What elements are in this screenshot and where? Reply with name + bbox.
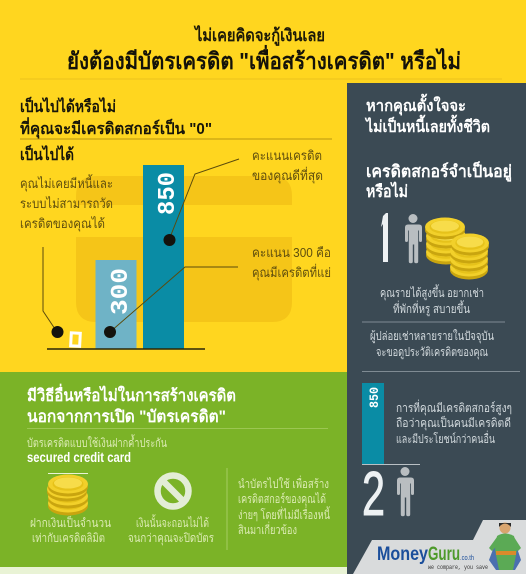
heading: never in debt: ไม่เป็นหนี้เลยทั้งชีวิต xyxy=(364,114,490,136)
text: use the card to build score: ง่ายๆ โดยที่ไม่มีเรื่องหนี้ xyxy=(238,506,330,522)
heading: never in debt xyxy=(364,93,490,136)
callout: best score xyxy=(252,148,323,184)
reason 2: 850 bar xyxy=(362,383,384,464)
logo text xyxy=(377,544,488,571)
logo text: we compare, you save xyxy=(428,564,488,571)
text: deposit equals limit: เท่ากับเครดิตลิมิต xyxy=(32,531,105,545)
bar label: 0 xyxy=(71,333,80,346)
callout lines and dots xyxy=(43,159,239,338)
text: no debt history: คุณไม่เคยมีหนี้และ xyxy=(20,174,113,192)
reason 2: 850 bar: 850 xyxy=(367,387,382,408)
callout: best score: คะแนนเครดิต xyxy=(252,148,322,163)
reason 1: coins xyxy=(425,218,489,280)
mascot xyxy=(489,522,521,570)
text: use the card to build score: สินมาเกี่ยวข้อง xyxy=(238,521,297,537)
text: no debt history: เครดิตของคุณได้ xyxy=(20,216,105,232)
subheading: possible: เป็นไปได้ xyxy=(20,143,74,164)
text: use the card to build score: เครดิตสกอร์ของคุณได้ xyxy=(238,492,326,507)
text: higher income: ที่พักที่หรู สบายขึ้น xyxy=(393,300,470,317)
heading: zero score question: เป็นไปได้หรือไม่ xyxy=(20,95,116,116)
panel: zero credit score xyxy=(20,95,332,349)
credit card watermark xyxy=(76,176,292,322)
text: landlords check credit: ผู้ปล่อยเช่าหลายรายในปัจจุบัน xyxy=(370,329,494,344)
text: high score benefits: ถือว่าคุณเป็นคนมีเครดิตดี xyxy=(396,415,511,431)
text: higher income: คุณรายได้สูงขึ้น อยากเช่า xyxy=(380,284,484,301)
bar: 850: 850 xyxy=(155,172,182,215)
text: cannot withdraw: เงินนั้นจะถอนไม่ได้ xyxy=(136,514,209,530)
text: secured credit card: บัตรเครดิตแบบใช้เงินฝากค้ำประกัน xyxy=(27,434,167,450)
logo block xyxy=(353,520,526,574)
panel: never in debt xyxy=(347,83,526,574)
heading: other ways xyxy=(27,383,236,426)
heading: zero score question xyxy=(20,95,212,139)
heading: other ways: นอกจากการเปิด "บัตรเครดิต" xyxy=(27,407,226,426)
bar: 300 xyxy=(96,260,136,349)
text: no debt history: ระบบไม่สามารถวัด xyxy=(20,196,113,211)
text: high score benefits xyxy=(396,399,512,446)
icon: coins xyxy=(47,474,88,516)
text: deposit equals limit: ฝากเงินเป็นจำนวน xyxy=(30,515,111,530)
heading: is score needed: หรือไม่ xyxy=(366,181,408,201)
callout: bad score xyxy=(252,245,331,281)
heading: never in debt: หากคุณตั้งใจจะ xyxy=(366,93,466,116)
bar: 850 xyxy=(143,165,184,349)
reason 1: person icon xyxy=(405,214,422,263)
panel: other ways to build credit xyxy=(0,372,347,574)
callout: best score: ของคุณดีที่สุด xyxy=(252,167,323,184)
text: cannot withdraw xyxy=(128,514,214,546)
bar chart: credit scores xyxy=(47,165,205,349)
callout: bad score: คุณมีเครดิตที่แย่ xyxy=(252,264,331,281)
text: higher income xyxy=(380,284,484,317)
heading: zero score question: ที่คุณจะมีเครดิตสกอร์เป็น "0" xyxy=(20,117,212,139)
title: ยังต้องมีบัตรเครดิต "เพื่อสร้างเครดิต" หรือไม่ xyxy=(67,44,461,74)
text: use the card to build score xyxy=(238,475,330,537)
callout: bad score: คะแนน 300 คือ xyxy=(252,245,331,260)
title xyxy=(67,25,461,74)
logo text: Guru xyxy=(428,544,460,565)
text: cannot withdraw: จนกว่าคุณจะปิดบัตร xyxy=(128,531,214,546)
reason 2: person icon xyxy=(397,467,414,516)
reason 2: number: 2 xyxy=(362,460,385,529)
text: landlords check credit xyxy=(370,329,494,360)
text: secured credit card: secured credit card xyxy=(27,449,131,465)
title: ไม่เคยคิดจะกู้เงินเลย xyxy=(193,25,325,47)
text: no debt history xyxy=(20,174,113,232)
axis xyxy=(47,348,205,350)
text: secured credit card xyxy=(27,434,167,465)
logo text: Money xyxy=(377,544,428,565)
reason 1: number xyxy=(381,213,388,262)
text: high score benefits: และมีประโยชน์กว่าคนอื่น xyxy=(396,430,495,446)
heading: is score needed xyxy=(366,160,512,201)
heading: other ways: มีวิธีอื่นหรือไม่ในการสร้างเครดิต xyxy=(27,383,236,405)
bar: 300: 300 xyxy=(108,268,135,315)
text: use the card to build score: นำบัตรไปใช้ เพื่อสร้าง xyxy=(238,475,329,491)
text: landlords check credit: จะขอดูประวัติเครดิตของคุณ xyxy=(376,345,488,360)
icon: prohibited sign xyxy=(158,476,188,506)
heading: is score needed: เครดิตสกอร์จำเป็นอยู่ xyxy=(366,160,512,183)
logo text: .co.th xyxy=(460,555,474,562)
text: deposit equals limit xyxy=(30,515,111,545)
